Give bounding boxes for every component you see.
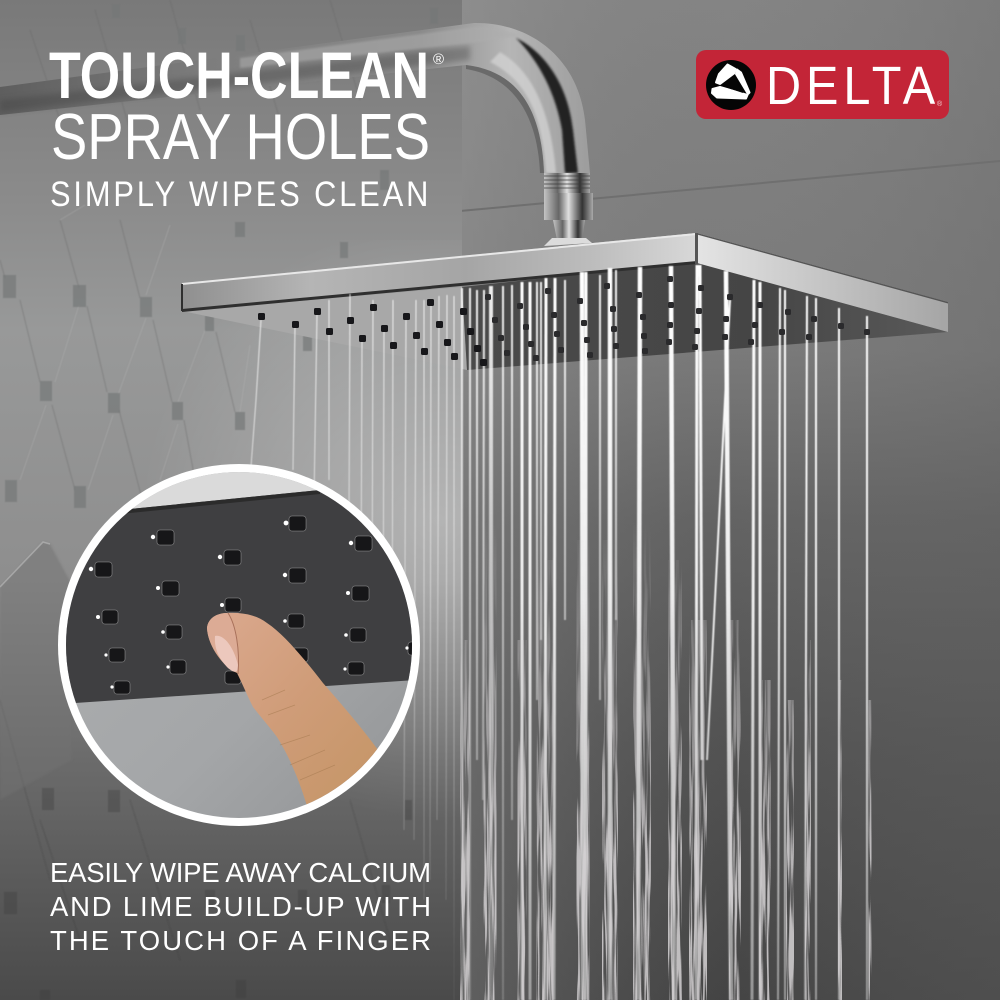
water streams bbox=[250, 265, 867, 1000]
threaded neck bbox=[544, 173, 590, 193]
description text: AND LIME BUILD-UP WITH bbox=[50, 891, 431, 922]
description text: EASILY WIPE AWAY CALCIUM bbox=[50, 857, 431, 888]
inset circle: finger wiping spray holes bbox=[50, 460, 430, 830]
background: right wall bbox=[455, 0, 1000, 1000]
mid streams bbox=[462, 270, 616, 1000]
thin left streams bbox=[250, 294, 454, 1000]
background: wall niche shelf bbox=[0, 542, 72, 800]
shower arm bbox=[0, 23, 593, 246]
bright streams bbox=[522, 265, 760, 1000]
spray holes bbox=[258, 276, 870, 366]
title: Touch-Clean Spray Holes: SPRAY HOLES bbox=[51, 100, 430, 173]
tile accent squares bbox=[3, 4, 438, 508]
Delta logo badge: ® bbox=[937, 100, 943, 108]
description text: THE TOUCH OF A FINGER bbox=[50, 925, 431, 956]
Delta logo badge: DELTA bbox=[766, 55, 936, 116]
inset spray holes bbox=[89, 516, 422, 694]
underside reflective section bbox=[182, 287, 467, 370]
tile lattice lines bbox=[0, 0, 390, 960]
shower head plate bbox=[181, 233, 948, 370]
broken lower water spray bbox=[465, 520, 870, 1000]
Delta logo badge bbox=[696, 50, 949, 119]
description text bbox=[50, 857, 431, 956]
plate underside in inset bbox=[60, 490, 430, 704]
background: tiled left wall bbox=[0, 0, 462, 1000]
collar bbox=[544, 193, 593, 220]
title: Touch-Clean Spray Holes bbox=[49, 38, 444, 213]
title: Touch-Clean Spray Holes: TOUCH-CLEAN bbox=[49, 38, 429, 112]
logo mark bbox=[706, 60, 756, 110]
finger bbox=[207, 613, 378, 806]
title: Touch-Clean Spray Holes: SIMPLY WIPES CLEAN bbox=[50, 174, 428, 213]
title: Touch-Clean Spray Holes: ® bbox=[433, 51, 444, 68]
